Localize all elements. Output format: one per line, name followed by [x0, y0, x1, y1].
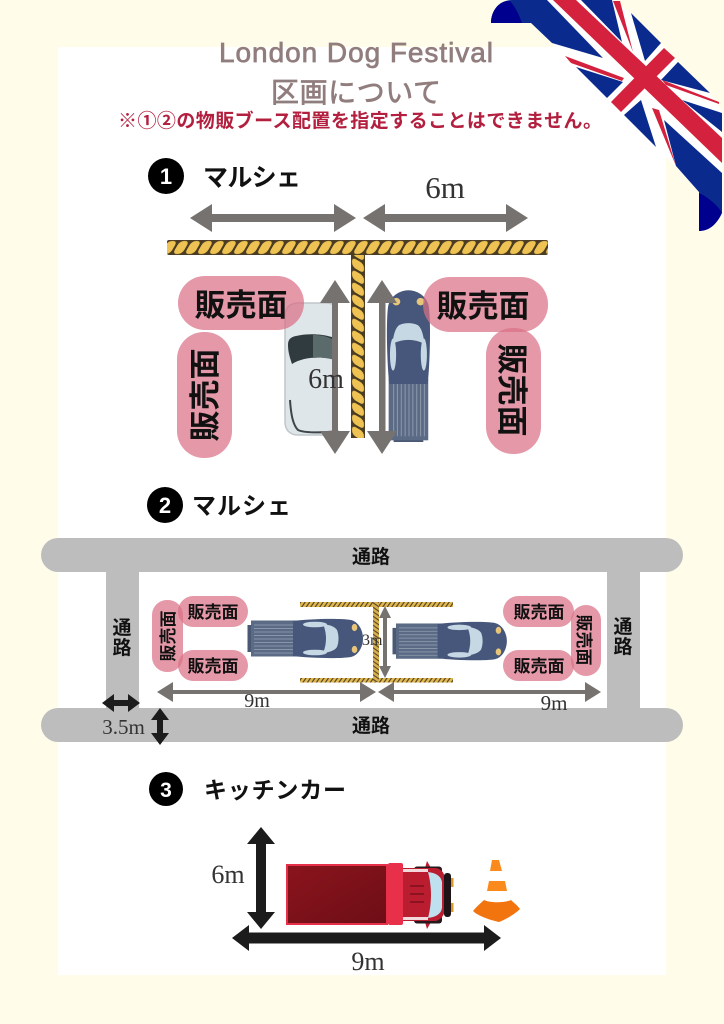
rope section	[300, 602, 453, 682]
heading 2	[147, 487, 291, 523]
title: London Dog Festival	[219, 37, 493, 68]
title	[219, 37, 493, 108]
background panel	[58, 47, 666, 975]
ribbon: union jack flag	[491, 0, 722, 231]
sales pills right: 販売面	[514, 656, 564, 676]
6m label center: 6m	[308, 364, 344, 395]
sales pills right: 販売面	[514, 602, 564, 622]
sales pill left: 販売面	[188, 348, 223, 442]
section 1 diagram	[167, 170, 548, 458]
heading 3: キッチンカー	[204, 777, 346, 803]
6m label: 6m	[211, 860, 245, 889]
heading 3	[149, 772, 346, 806]
sales pill top left: 販売面	[194, 288, 288, 323]
sales pills right	[503, 596, 601, 681]
white masks	[338, 303, 432, 447]
left pickup	[248, 619, 363, 658]
white car	[285, 303, 340, 435]
sales pill right: 販売面	[494, 344, 529, 436]
road label left: 路	[112, 637, 132, 659]
3m label: 3m	[362, 632, 383, 649]
vertical arrow left	[320, 280, 350, 454]
sales pill top right: 販売面	[436, 289, 530, 324]
heading 3: 3	[160, 779, 172, 802]
road label right: 路	[613, 636, 633, 658]
heading 1: マルシェ	[203, 164, 301, 192]
heading 2: マルシェ	[192, 493, 291, 520]
red truck	[287, 861, 454, 929]
vertical arrow right	[367, 280, 397, 454]
9m arrow left	[157, 682, 376, 702]
road label right	[613, 616, 633, 658]
width arrow left	[190, 204, 356, 232]
sales pills left: 販売面	[158, 610, 178, 662]
sales pill top right	[423, 277, 548, 332]
sales pills right: 販売面	[574, 614, 594, 666]
road label bottom: 通路	[352, 715, 390, 737]
black arrow height	[151, 708, 169, 745]
sales pill top left	[178, 276, 304, 330]
black arrow width	[102, 694, 140, 712]
6m label top: 6m	[425, 170, 465, 205]
heading 1	[148, 158, 301, 194]
title: 区画について	[271, 77, 441, 108]
sales pills left: 販売面	[188, 656, 238, 676]
rope T	[167, 240, 548, 438]
sales pill left	[177, 332, 232, 458]
road label left: 通	[112, 617, 132, 639]
9m arrow right	[378, 682, 601, 702]
6m vertical arrow	[247, 827, 275, 929]
note text: ※①②の物販ブース配置を指定することはできません。	[118, 109, 602, 132]
width arrow right	[363, 204, 528, 232]
heading 2: 2	[159, 493, 171, 518]
9m label right: 9m	[541, 691, 567, 715]
heading 1: 1	[160, 164, 172, 189]
roads	[41, 538, 683, 742]
sales pills left	[152, 596, 248, 681]
sales pill right	[486, 328, 541, 454]
road label right: 通	[613, 616, 633, 638]
traffic cone	[473, 860, 520, 922]
right pickup	[393, 622, 507, 660]
9m horizontal arrow	[232, 925, 501, 951]
road label left	[112, 617, 132, 659]
9m label: 9m	[351, 947, 385, 976]
9m label left: 9m	[244, 690, 270, 712]
section 2 diagram	[41, 538, 683, 745]
3m arrow	[379, 606, 391, 678]
pickup car	[387, 290, 430, 445]
section 3 diagram	[211, 827, 520, 976]
sales pills left: 販売面	[188, 602, 238, 622]
3.5m label: 3.5m	[102, 715, 145, 739]
road label top: 通路	[352, 546, 390, 568]
